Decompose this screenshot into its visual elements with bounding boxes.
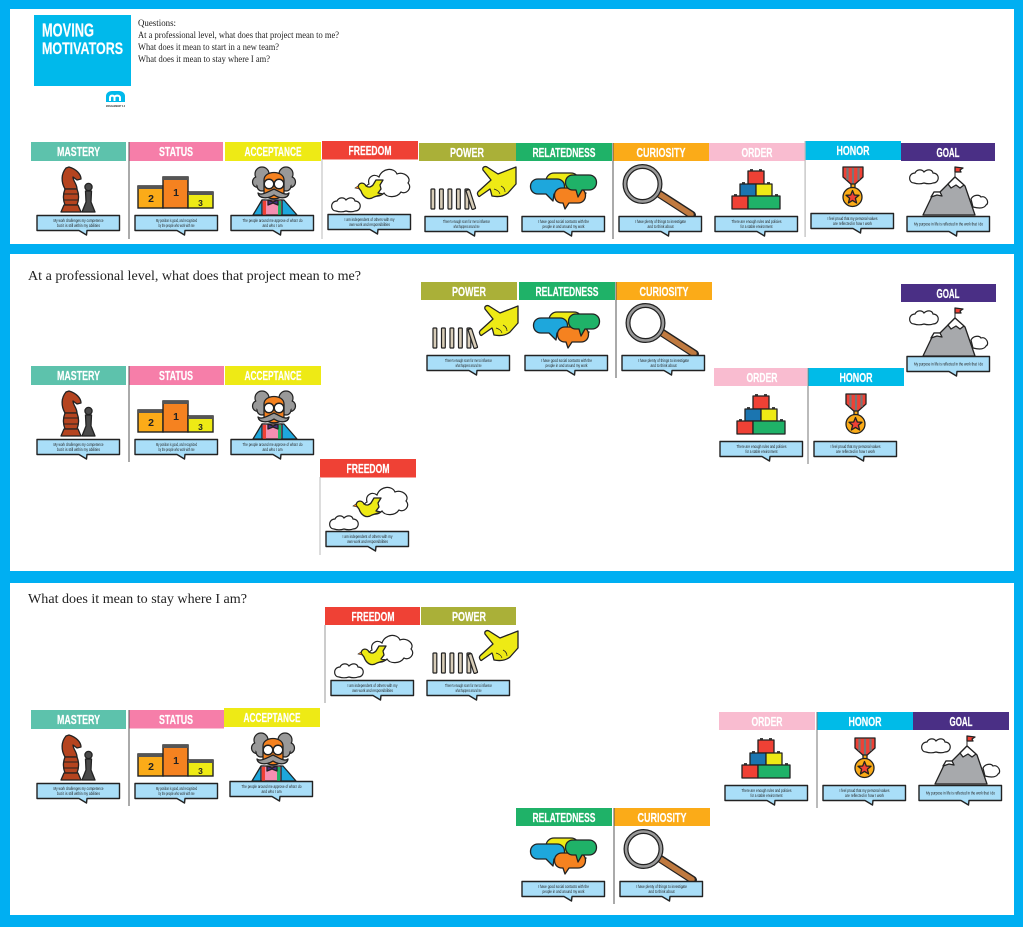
header: relatedness: RELATEDNESS <box>532 145 596 160</box>
bubble: mastery: but it is still within my abilities <box>57 223 101 228</box>
questions text: At a professional level, what does that project mean to me? <box>138 30 339 41</box>
card: honor <box>816 712 913 808</box>
bubble: freedom <box>331 680 414 700</box>
icon: bricks <box>732 169 780 209</box>
icon: bird and clouds <box>332 169 410 212</box>
bubble: honor <box>814 442 896 461</box>
card: freedom <box>324 607 420 703</box>
questions text: What does it mean to start in a new team? <box>138 43 279 53</box>
bubble: status: by the people who work with me <box>158 223 195 228</box>
bubble: freedom: own work and responsibilities <box>349 222 391 227</box>
title block: MOTIVATORS <box>42 39 123 58</box>
bubble: power <box>425 216 508 236</box>
card: mastery <box>31 142 126 235</box>
header: status: STATUS <box>159 368 193 383</box>
bubble: freedom: I am independent of others with my <box>342 534 393 539</box>
icon: hand and dominoes <box>431 167 516 210</box>
bubble: curiosity: and to think about <box>648 224 674 229</box>
icon: mountain <box>922 736 1000 784</box>
header: mastery: MASTERY <box>57 712 100 727</box>
bubble: order <box>720 442 802 461</box>
bubble: curiosity <box>620 882 702 901</box>
bubble: freedom <box>328 214 410 234</box>
header: curiosity: CURIOSITY <box>638 810 687 825</box>
header: mastery: MASTERY <box>57 144 100 159</box>
card: curiosity <box>612 143 709 239</box>
bubble: curiosity: I have plenty of things to investigate <box>638 358 689 363</box>
bubble: honor: are reflected in how I work <box>833 221 873 226</box>
bubble: honor: are reflected in how I work <box>845 793 885 798</box>
bubble: curiosity: I have plenty of things to investigate <box>636 884 687 889</box>
title block <box>34 15 131 86</box>
card: status <box>128 710 224 806</box>
bubble: freedom: own work and responsibilities <box>347 539 389 544</box>
card: goal <box>901 143 995 236</box>
icon: medal <box>855 738 875 778</box>
bubble: relatedness: I have good social contacts with the <box>541 358 592 363</box>
icon: hand and dominoes <box>433 631 518 674</box>
bubble: power: what happens around me <box>456 688 482 693</box>
bubble: mastery: My work challenges my competence <box>54 786 104 791</box>
card: relatedness <box>519 282 615 375</box>
header: goal: GOAL <box>936 286 960 301</box>
title block: MOVING <box>42 20 94 40</box>
icon: speech bubbles <box>530 838 596 874</box>
icon: knight and pawn <box>61 735 95 780</box>
card: freedom <box>322 141 418 239</box>
header: power: POWER <box>452 609 486 624</box>
icon: bird and clouds <box>330 487 408 530</box>
icon: bird and clouds <box>335 635 413 678</box>
panel: top <box>10 9 1014 244</box>
questions text: Questions: <box>138 19 176 29</box>
bubble: power: what happens around me <box>454 224 480 229</box>
bubble: power: There's enough room for me to influence <box>445 683 492 688</box>
bubble: order: There are enough rules and policies <box>732 219 782 224</box>
card: status <box>128 142 223 239</box>
header: goal: GOAL <box>950 714 973 729</box>
icon: speech bubbles <box>534 312 600 348</box>
card: power <box>421 282 518 375</box>
card: honor <box>804 141 901 237</box>
card: honor <box>808 368 904 464</box>
panel: bottom <box>10 583 1014 915</box>
header: acceptance: ACCEPTANCE <box>244 710 301 725</box>
questions text <box>138 19 339 65</box>
header: power: POWER <box>450 145 484 160</box>
bubble: mastery: but it is still within my abilities <box>57 447 101 452</box>
card: goal <box>901 284 996 376</box>
row 3 cards <box>31 607 1009 904</box>
bubble: goal: My purpose in life is reflected in the work that I do <box>914 222 983 226</box>
row 1 cards <box>31 141 995 239</box>
header: power: POWER <box>452 284 486 299</box>
bubble: honor: are reflected in how I work <box>836 449 876 454</box>
icon: magnifying glass <box>628 306 695 354</box>
bubble: mastery <box>37 440 120 459</box>
row 2 cards <box>31 282 996 555</box>
header: honor: HONOR <box>840 370 873 385</box>
bubble: status <box>135 216 218 235</box>
bubble: mastery <box>37 784 120 803</box>
card: power <box>421 607 518 700</box>
icon: professor <box>252 167 297 215</box>
icon: bricks <box>742 738 790 778</box>
bubble: acceptance <box>230 782 312 801</box>
icon: podium <box>138 401 213 432</box>
bubble: order: for a stable environment <box>740 224 773 229</box>
card: order <box>714 368 807 461</box>
header: mastery: MASTERY <box>57 368 100 383</box>
icon: professor <box>252 391 297 439</box>
header: curiosity: CURIOSITY <box>636 145 686 160</box>
bubble: freedom: I am independent of others with my <box>344 217 395 222</box>
icon: medal <box>846 394 866 434</box>
icon: professor <box>252 733 296 781</box>
bubble: status: My position is good, and recognized <box>156 786 197 791</box>
header: status: STATUS <box>159 712 193 727</box>
bubble: curiosity: and to think about <box>650 363 677 368</box>
header: freedom: FREEDOM <box>346 461 390 476</box>
icon: management 3.0 logo: MANAGEMENT 3.0 <box>106 104 125 108</box>
bubble: curiosity <box>622 356 704 375</box>
header: relatedness: RELATEDNESS <box>532 810 596 825</box>
header: honor: HONOR <box>848 714 882 729</box>
card: mastery <box>31 366 126 459</box>
bubble: power <box>427 680 510 700</box>
bubble: relatedness <box>522 882 604 901</box>
bubble: relatedness: I have good social contacts with the <box>538 219 589 224</box>
icon: podium <box>138 177 213 208</box>
bubble: power: what happens around me <box>456 363 482 368</box>
icon: speech bubbles <box>530 173 596 209</box>
bubble: relatedness: people in and around my work <box>542 224 585 229</box>
bubble: acceptance: and who I am <box>262 789 282 794</box>
bubble: acceptance <box>231 440 314 459</box>
bubble: order <box>715 216 798 236</box>
bubble: status <box>135 784 218 803</box>
bubble: order <box>725 786 808 805</box>
icon: hand and dominoes <box>433 306 518 349</box>
bubble: relatedness: I have good social contacts with the <box>538 884 589 889</box>
card: curiosity <box>614 808 710 904</box>
bubble: status: by the people who work with me <box>158 791 195 796</box>
bubble: status: by the people who work with me <box>158 447 195 452</box>
icon: mountain <box>910 308 988 356</box>
header: order: ORDER <box>742 145 773 160</box>
bubble: power: There's enough room for me to influence <box>443 219 490 224</box>
bubble: acceptance: The people around me approve of what I do <box>242 784 302 789</box>
header: honor: HONOR <box>836 143 870 158</box>
bubble: freedom: own work and responsibilities <box>352 688 394 693</box>
bubble: acceptance <box>231 216 314 235</box>
icon: podium <box>138 745 213 776</box>
card: acceptance <box>225 142 321 235</box>
card: relatedness <box>516 143 612 236</box>
header: acceptance: ACCEPTANCE <box>244 368 302 383</box>
header: goal: GOAL <box>936 145 960 160</box>
card: acceptance <box>225 366 321 459</box>
bubble: curiosity <box>619 216 702 236</box>
header: status: STATUS <box>159 144 193 159</box>
bubble: honor: I feel proud that my personal values <box>828 216 878 221</box>
bubble: honor <box>823 786 906 805</box>
bubble: order: There are enough rules and policies <box>742 788 792 793</box>
icon: medal <box>843 167 863 206</box>
bubble: curiosity: I have plenty of things to investigate <box>635 219 686 224</box>
card: order <box>709 143 805 236</box>
card: order <box>719 712 815 805</box>
bubble: freedom: I am independent of others with my <box>348 683 398 688</box>
bubble: mastery: but it is still within my abilities <box>57 791 101 796</box>
header: order: ORDER <box>746 370 778 385</box>
heading: stay where I am: What does it mean to stay where I am? <box>28 591 247 606</box>
header: freedom: FREEDOM <box>348 143 392 158</box>
icon: magnifying glass <box>626 832 693 880</box>
card: curiosity <box>616 282 712 378</box>
bubble: freedom <box>326 532 408 551</box>
bubble: acceptance: and who I am <box>262 447 283 452</box>
bubble: acceptance: and who I am <box>262 223 283 228</box>
bubble: order: for a stable environment <box>746 449 778 454</box>
header: order: ORDER <box>752 714 783 729</box>
icon: knight and pawn <box>61 167 95 212</box>
bubble: order: for a stable environment <box>750 793 783 798</box>
header: freedom: FREEDOM <box>352 609 394 624</box>
questions text: What does it mean to stay where I am? <box>138 55 270 65</box>
bubble: honor: I feel proud that my personal values <box>840 788 890 793</box>
bubble: relatedness <box>525 356 608 375</box>
bubble: curiosity: and to think about <box>648 889 675 894</box>
bubble: relatedness: people in and around my work <box>542 889 585 894</box>
card: mastery <box>31 710 126 803</box>
bubble: order: There are enough rules and policies <box>736 444 787 449</box>
header: acceptance: ACCEPTANCE <box>244 144 302 159</box>
bubble: honor: I feel proud that my personal values <box>830 444 881 449</box>
card: acceptance <box>224 708 320 801</box>
bubble: goal: My purpose in life is reflected in the work that I do <box>926 790 995 796</box>
bubble: status: My position is good, and recognized <box>156 442 197 447</box>
bubble: status <box>135 440 218 459</box>
icon: mountain <box>910 167 988 215</box>
card: relatedness <box>516 808 612 901</box>
bubble: relatedness <box>522 216 604 236</box>
bubble: honor <box>811 214 894 233</box>
bubble: acceptance: The people around me approve of what I do <box>242 442 303 447</box>
icon: magnifying glass <box>625 166 692 215</box>
icon: knight and pawn <box>61 391 95 436</box>
heading: professional level: At a professional level, what does that project mean to me? <box>28 268 361 283</box>
icon: bricks <box>737 394 785 434</box>
card: status <box>128 366 224 462</box>
bubble: mastery: My work challenges my competence <box>54 218 104 223</box>
bubble: status: My position is good, and recognized <box>156 218 197 223</box>
header: curiosity: CURIOSITY <box>640 284 689 299</box>
bubble: power: There's enough room for me to influence <box>445 358 492 363</box>
card: freedom <box>320 459 416 555</box>
header: relatedness: RELATEDNESS <box>536 284 599 299</box>
card: power <box>419 143 516 236</box>
card: goal <box>913 712 1009 805</box>
bubble: relatedness: people in and around my work <box>546 363 588 368</box>
bubble: mastery: My work challenges my competence <box>54 442 104 447</box>
bubble: goal: My purpose in life is reflected in the work that I do <box>914 362 983 366</box>
bubble: mastery <box>37 216 120 235</box>
bubble: power <box>427 356 510 375</box>
bubble: acceptance: The people around me approve of what I do <box>242 218 303 223</box>
icon: management 3.0 logo <box>106 91 125 108</box>
panel: middle <box>10 254 1014 571</box>
